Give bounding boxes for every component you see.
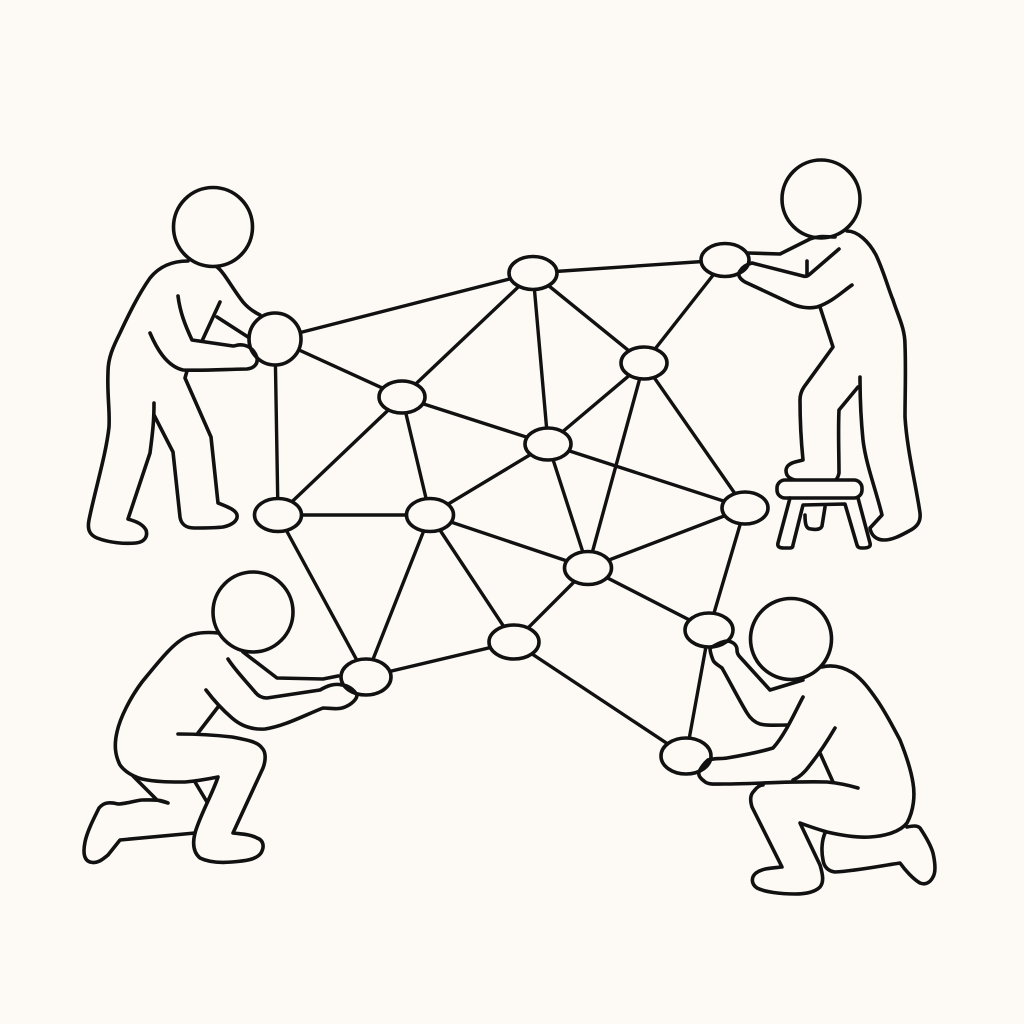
network nodes (249, 244, 768, 774)
person: top left standing (88, 188, 260, 543)
network edges (275, 260, 745, 756)
stool (777, 480, 870, 548)
person: bottom left kneeling (84, 572, 357, 863)
person: top right on stool (739, 160, 920, 540)
person: bottom right kneeling (699, 598, 935, 894)
